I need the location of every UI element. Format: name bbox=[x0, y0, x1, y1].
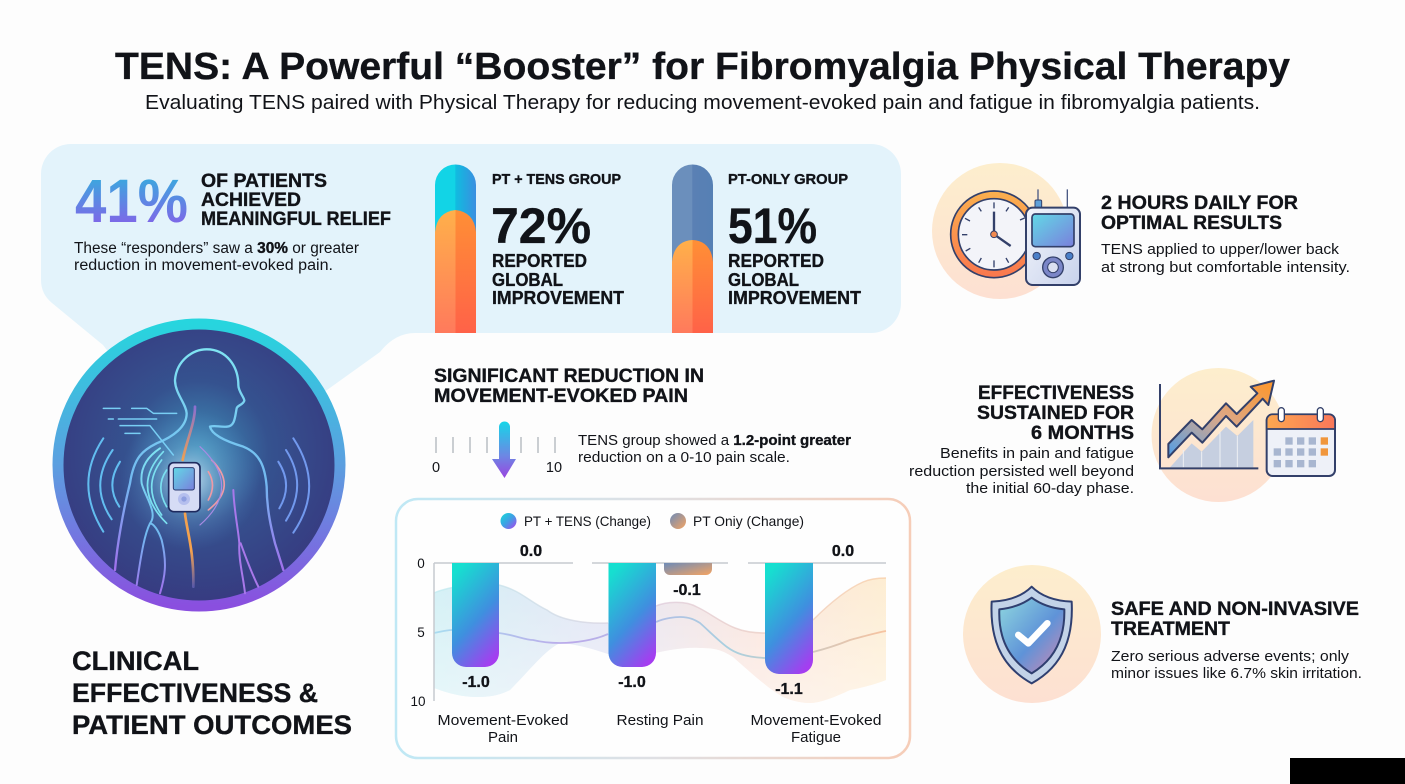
text block: safe and non-invasive: minor issues like 6.7% skin irritation. bbox=[1111, 665, 1362, 682]
heading: significant reduction: MOVEMENT-EVOKED PAIN bbox=[434, 386, 688, 407]
stat: 41 percent responders: 41% bbox=[75, 167, 188, 235]
bar values: -0.1 bbox=[673, 582, 701, 599]
heading: significant reduction bbox=[434, 366, 704, 407]
text block: effectiveness sustained: the initial 60-day phase. bbox=[966, 480, 1134, 497]
icon: clock and TENS device bbox=[932, 163, 1080, 299]
stat: PT + TENS 72 percent: PT + TENS GROUP bbox=[492, 172, 621, 188]
bar values bbox=[462, 543, 854, 698]
heading: clinical effectiveness: CLINICAL bbox=[72, 646, 199, 676]
panel: bar chart card bbox=[396, 499, 910, 758]
pain scale description: reduction on a 0-10 pain scale. bbox=[578, 450, 790, 466]
stat: PT + TENS 72 percent: GLOBAL bbox=[492, 270, 563, 290]
text block: safe and non-invasive: SAFE AND NON-INVASIVE bbox=[1111, 599, 1359, 620]
stat: PT + TENS 72 percent: REPORTED bbox=[492, 251, 587, 271]
chart axes: 10 bbox=[410, 694, 426, 709]
stat: PT + TENS 72 percent: 72% bbox=[491, 198, 591, 254]
text block: effectiveness sustained: reduction persisted well beyond bbox=[909, 463, 1134, 480]
pain scale description: TENS group showed a 1.2-point greater bbox=[578, 433, 851, 449]
chart axes: 0 bbox=[417, 556, 425, 571]
chart axes bbox=[410, 556, 886, 709]
chart area background bbox=[434, 578, 886, 703]
bar values: -1.0 bbox=[618, 674, 646, 691]
text block: effectiveness sustained bbox=[909, 383, 1134, 497]
pain scale with down arrow bbox=[432, 422, 562, 478]
category labels bbox=[438, 712, 882, 746]
text block: 2 hours daily: OPTIMAL RESULTS bbox=[1101, 213, 1282, 234]
bar values: -1.1 bbox=[775, 681, 803, 698]
pain scale with down arrow: 0 bbox=[432, 460, 440, 476]
panel: key results callout bbox=[41, 144, 901, 470]
stat: PT + TENS 72 percent bbox=[491, 172, 624, 308]
heading: significant reduction: SIGNIFICANT REDUCTION IN bbox=[434, 366, 704, 387]
category labels: Pain bbox=[488, 729, 518, 746]
pain scale with down arrow: 10 bbox=[546, 460, 562, 476]
chart axes: 5 bbox=[417, 625, 425, 640]
stat: PT-only 51 percent: PT-ONLY GROUP bbox=[728, 172, 848, 188]
black corner block bbox=[1290, 758, 1405, 784]
stat: 41 percent responders: MEANINGFUL RELIEF bbox=[201, 209, 391, 230]
stat: PT-only 51 percent: GLOBAL bbox=[728, 270, 799, 290]
heading: clinical effectiveness bbox=[72, 646, 352, 740]
bar: PT-only group bbox=[672, 164, 713, 333]
stat: 41 percent responders: ACHIEVED bbox=[201, 190, 301, 211]
category labels: Resting Pain bbox=[616, 712, 704, 729]
text block: 2 hours daily: 2 HOURS DAILY FOR bbox=[1101, 193, 1298, 214]
category labels: Movement-Evoked bbox=[438, 712, 568, 729]
category labels: Movement-Evoked bbox=[750, 712, 882, 729]
stat: PT + TENS 72 percent: IMPROVEMENT bbox=[492, 288, 624, 308]
text block: effectiveness sustained: 6 MONTHS bbox=[1031, 423, 1134, 444]
bar values: 0.0 bbox=[832, 543, 854, 560]
heading: clinical effectiveness: PATIENT OUTCOMES bbox=[72, 710, 352, 740]
chart legend: PT + TENS (Change) bbox=[524, 513, 651, 529]
title: TENS: A Powerful “Booster” for Fibromyalgia Physical Therapy bbox=[115, 46, 1290, 88]
stat: 41 percent responders bbox=[74, 167, 391, 274]
bar values: -1.0 bbox=[462, 674, 490, 691]
category labels: Fatigue bbox=[791, 729, 841, 746]
text block: effectiveness sustained: EFFECTIVENESS bbox=[978, 383, 1134, 404]
stat: PT-only 51 percent bbox=[728, 172, 861, 308]
text block: 2 hours daily bbox=[1101, 193, 1350, 276]
text block: safe and non-invasive: Zero serious adverse events; only bbox=[1111, 648, 1350, 665]
text block: effectiveness sustained: Benefits in pain and fatigue bbox=[940, 445, 1134, 462]
pain scale description bbox=[578, 433, 851, 466]
icon: rising chart and calendar bbox=[1152, 368, 1335, 502]
stat: PT-only 51 percent: 51% bbox=[728, 198, 817, 254]
text block: 2 hours daily: at strong but comfortable intensity. bbox=[1101, 259, 1350, 276]
heading: clinical effectiveness: EFFECTIVENESS & bbox=[72, 678, 318, 708]
text block: safe and non-invasive bbox=[1111, 599, 1362, 682]
chart legend: PT Oniy (Change) bbox=[693, 513, 804, 529]
stat: PT-only 51 percent: IMPROVEMENT bbox=[728, 288, 861, 308]
text block: effectiveness sustained: SUSTAINED FOR bbox=[977, 403, 1134, 424]
text block: safe and non-invasive: TREATMENT bbox=[1111, 619, 1230, 640]
chart legend bbox=[500, 513, 804, 529]
icon: shield with check bbox=[963, 565, 1101, 703]
stat: 41 percent responders: OF PATIENTS bbox=[201, 171, 327, 192]
subtitle: Evaluating TENS paired with Physical Therapy for reducing movement-evoked pain and fatigue in fibromyalgia patients. bbox=[145, 92, 1260, 114]
stat: 41 percent responders: reduction in movement-evoked pain. bbox=[74, 257, 333, 274]
illustration: body with TENS device bbox=[58, 324, 340, 606]
stat: 41 percent responders: These “responders” saw a 30% or greater bbox=[74, 240, 359, 257]
text block: 2 hours daily: TENS applied to upper/lower back bbox=[1101, 241, 1340, 258]
stat: PT-only 51 percent: REPORTED bbox=[728, 251, 824, 271]
bars bbox=[452, 563, 813, 674]
bar: PT + TENS group bbox=[435, 164, 476, 333]
bar values: 0.0 bbox=[520, 543, 542, 560]
